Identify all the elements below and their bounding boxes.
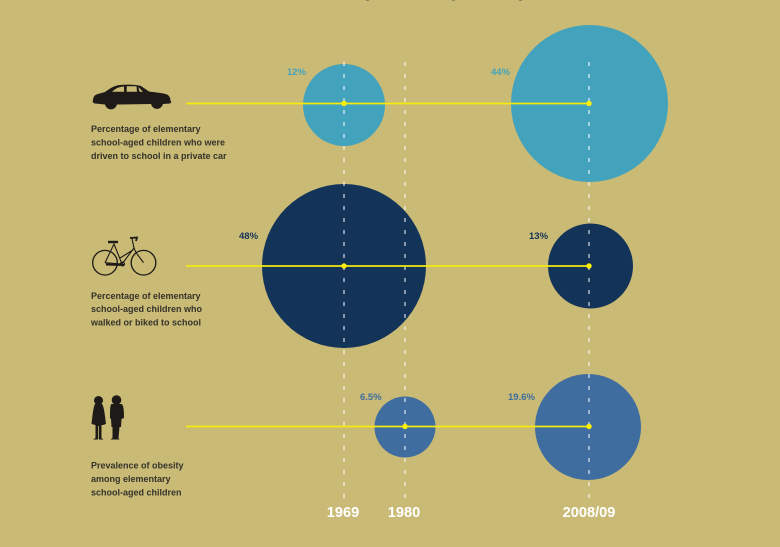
caption: obesity: among elementary (91, 474, 171, 484)
icon: bicycle (93, 238, 156, 275)
caption: bike: Percentage of elementary (91, 291, 201, 301)
caption: bike: walked or biked to school (90, 318, 201, 328)
bubble: obesity 2008/09 19.6% (535, 374, 641, 480)
caption: obesity: Prevalence of obesity (91, 460, 184, 470)
row: obesity (360, 374, 641, 480)
label: 6.5%: 6.5% (360, 392, 382, 403)
bubble: obesity 1980 6.5% (374, 396, 436, 458)
bubble: bike 1969 48% (262, 184, 426, 348)
year label: 1969: 1969 (327, 505, 359, 521)
label: 12%: 12% (287, 67, 307, 78)
year guide lines (344, 62, 589, 499)
icon: two children (92, 395, 124, 440)
caption: obesity: school-aged children (91, 488, 182, 498)
caption: car: Percentage of elementary (91, 124, 201, 134)
caption: bike: school-aged children who (91, 304, 203, 314)
label: 19.6%: 19.6% (508, 392, 535, 403)
yellow timeline: bike (186, 263, 592, 269)
bubble: car 1969 12% (303, 64, 385, 146)
label: 13%: 13% (529, 231, 549, 242)
year label: 1980: 1980 (388, 505, 420, 521)
caption: car: school-aged children who were (91, 138, 225, 148)
bubble: car 2008/09 44% (511, 25, 668, 182)
icon: car (93, 85, 172, 109)
bubble: bike 2008/09 13% (548, 224, 633, 308)
yellow timeline: obesity (186, 424, 592, 429)
row: walked or biked (239, 184, 633, 348)
row: driven to school (287, 25, 668, 182)
label: 48%: 48% (239, 231, 259, 242)
caption: car: driven to school in a private car (91, 151, 227, 161)
yellow timeline: car (186, 101, 592, 106)
year label: 2008/09: 2008/09 (563, 505, 615, 521)
label: 44%: 44% (491, 67, 511, 78)
